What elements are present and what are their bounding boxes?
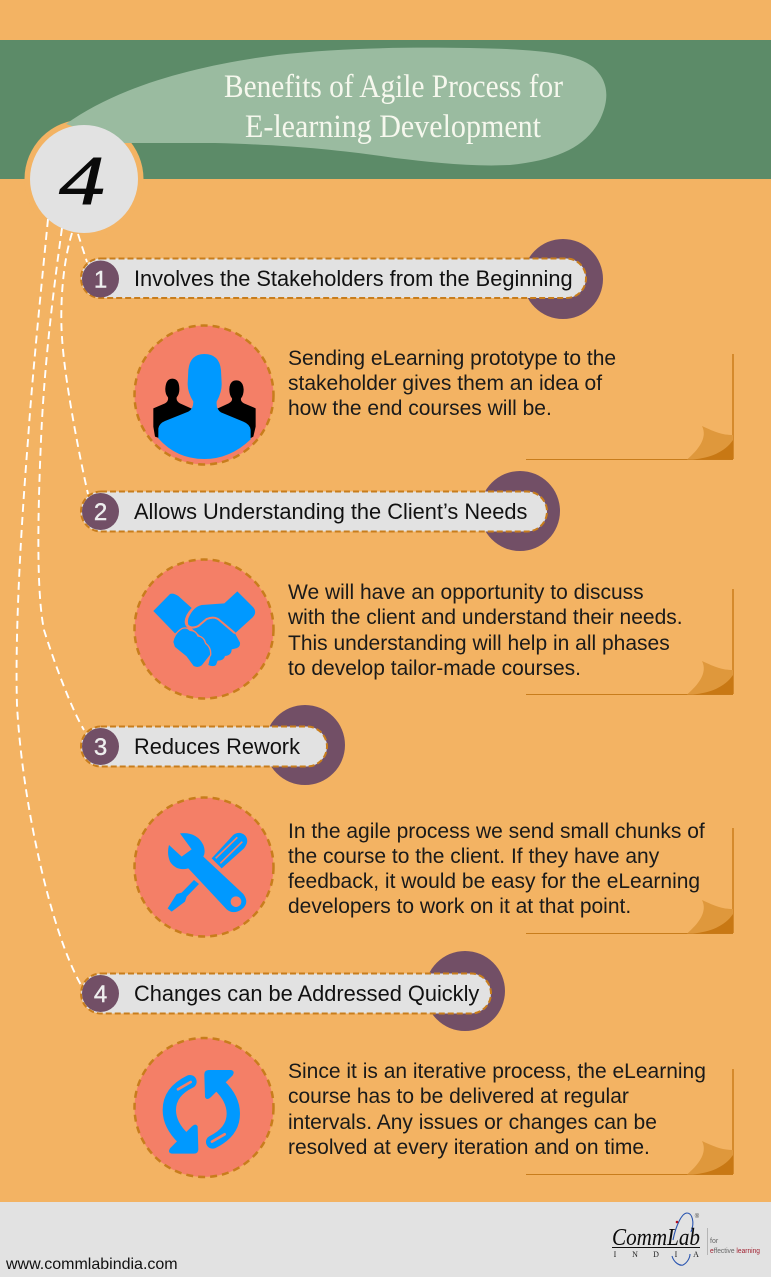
icon: sync arrows [134,1038,274,1177]
text block 3 [288,820,705,918]
section 1 [81,239,733,464]
logo: CommLab India: effective learning [710,1248,760,1255]
text block 4: course has to be delivered at regular [288,1085,629,1108]
icon: handshake [134,560,274,698]
icon: tools [134,798,274,936]
heading 1 [81,239,603,319]
text block 1: stakeholder gives them an idea of [288,372,602,395]
page curl 1 [526,354,733,460]
title [224,69,563,145]
text block 3: feedback, it would be easy for the eLearning [288,870,700,893]
page curl 2 [526,589,733,694]
heading 1: Involves the Stakeholders from the Beginning [134,266,573,291]
orange circle behind number [24,120,144,238]
header band [0,40,771,179]
heading 4: 4 [94,981,107,1008]
logo: CommLab India: I [675,1250,678,1259]
heading 4 [81,951,505,1031]
text block 2: with the client and understand their needs. [287,606,683,629]
text block 2: to develop tailor-made courses. [288,657,581,680]
text block 3: developers to work on it at that point. [288,895,631,918]
heading 3: 3 [94,734,107,761]
text block 4 [288,1060,706,1159]
section 4 [81,951,733,1177]
icon: people [134,326,274,464]
number 4 badge: 4 [59,142,105,220]
logo: CommLab India: for [710,1238,719,1245]
logo: CommLab India: D [653,1250,659,1259]
text block 2: We will have an opportunity to discuss [288,581,644,604]
title: E-learning Development [245,109,541,145]
title: Benefits of Agile Process for [224,69,563,105]
heading 1: 1 [94,266,107,294]
text block 3: In the agile process we send small chunks of [288,820,705,843]
logo: CommLab India: CommLab [612,1225,700,1251]
heading 2: 2 [94,499,107,526]
page curl 4 [526,1069,733,1174]
footer band [0,1202,771,1277]
text block 2: This understanding will help in all phases [288,632,670,655]
heading 4: Changes can be Addressed Quickly [134,981,479,1006]
section 3 [81,705,733,936]
website url: www.commlabindia.com [5,1256,178,1273]
text block 1: Sending eLearning prototype to the [288,347,616,370]
dashed connector lines [17,219,88,985]
heading 3: Reduces Rework [134,734,300,759]
logo: CommLab India: ® [695,1213,700,1220]
text block 2 [287,581,683,680]
title speech blob [66,48,606,165]
text block 1: how the end courses will be. [288,397,552,420]
heading 2 [81,471,560,551]
section 2 [81,471,733,698]
text block 1 [288,347,616,420]
logo: CommLab India: I [614,1250,617,1259]
page curl 3 [526,828,733,934]
logo: CommLab India [612,1213,760,1265]
text block 4: Since it is an iterative process, the eLearning [288,1060,706,1083]
heading 3 [81,705,345,785]
text block 4: intervals. Any issues or changes can be [288,1111,657,1134]
logo: CommLab India: A [693,1250,699,1259]
number 4 badge [30,125,138,233]
text block 4: resolved at every iteration and on time. [288,1136,650,1159]
heading 2: Allows Understanding the Client’s Needs [134,499,527,524]
logo: CommLab India: N [632,1250,638,1259]
text block 3: the course to the client. If they have any [288,845,660,868]
